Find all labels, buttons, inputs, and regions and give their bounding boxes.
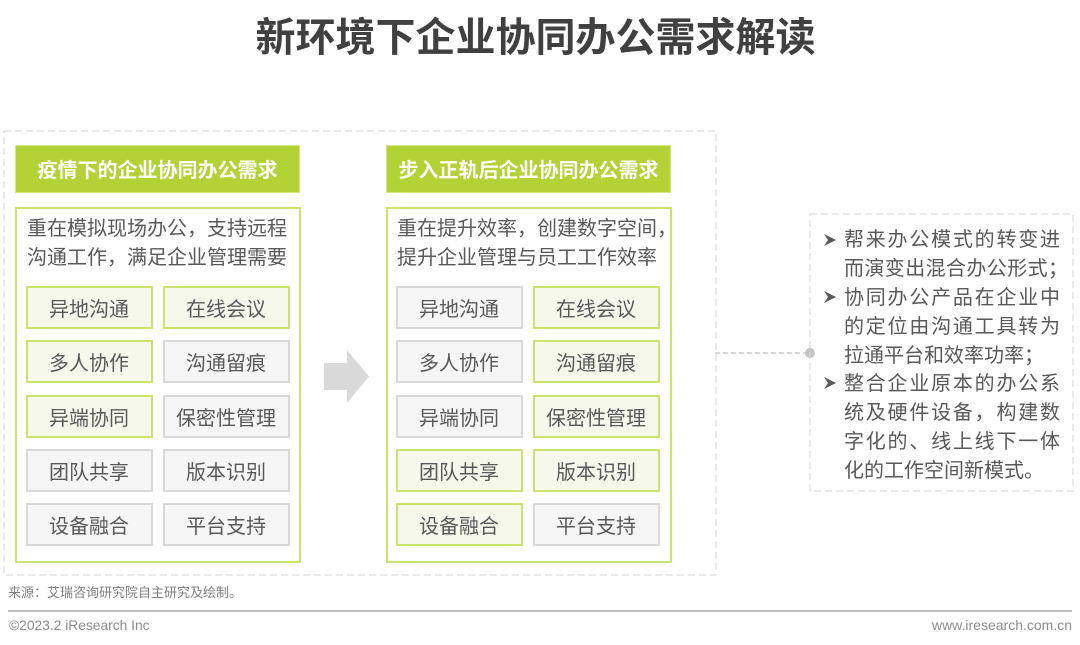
chip: device integration: 设备融合 xyxy=(49,516,129,538)
chip: collaboration xyxy=(26,340,153,383)
chip: platform support: 平台支持 xyxy=(186,516,266,538)
chip: remote communication: 异地沟通 xyxy=(419,299,499,321)
chip: communication trace: 沟通留痕 xyxy=(186,353,266,375)
takeaway line: 字化的、线上线下一体 xyxy=(844,431,1060,453)
chip: team sharing: 团队共享 xyxy=(49,462,129,484)
text block: takeaways xyxy=(824,228,1068,482)
chip: cross-device sync xyxy=(26,395,153,438)
takeaway line: 而演变出混合办公形式； xyxy=(844,258,1068,280)
panel: normalised needs xyxy=(386,207,672,563)
takeaway line: 拉通平台和效率功率； xyxy=(844,345,1044,367)
text: pandemic summary xyxy=(27,218,287,269)
bullet 2 xyxy=(824,291,836,303)
takeaway line: 统及硬件设备，构建数 xyxy=(844,402,1060,424)
chip: remote communication: 异地沟通 xyxy=(49,299,129,321)
text: pandemic summary: 重在模拟现场办公，支持远程 xyxy=(27,218,287,240)
chip: team sharing xyxy=(26,449,153,492)
takeaway line: 帮来办公模式的转变进 xyxy=(844,229,1060,251)
footer rule xyxy=(8,610,1072,612)
chip: version control xyxy=(533,449,660,492)
takeaway line: 协同办公产品在企业中 xyxy=(844,287,1060,309)
chip: online meeting: 在线会议 xyxy=(186,299,266,321)
chip: version control: 版本识别 xyxy=(186,462,266,484)
bullet 1 xyxy=(824,234,836,246)
chip: platform support: 平台支持 xyxy=(556,516,636,538)
chip: confidentiality management xyxy=(533,395,660,438)
chip: online meeting: 在线会议 xyxy=(556,299,636,321)
takeaway line: 化的工作空间新模式。 xyxy=(844,460,1044,482)
chip: device integration xyxy=(396,503,523,546)
chip: remote communication xyxy=(26,286,153,329)
chip: version control xyxy=(163,449,290,492)
footer: copyright: ©2023.2 iResearch Inc xyxy=(9,618,150,633)
panel: pandemic needs xyxy=(15,207,301,563)
text: normalised summary xyxy=(397,218,677,269)
panel: takeaways xyxy=(810,213,1074,492)
chip: collaboration xyxy=(396,340,523,383)
chip: device integration: 设备融合 xyxy=(419,516,499,538)
chip: collaboration: 多人协作 xyxy=(49,353,129,375)
takeaway line: 的定位由沟通工具转为 xyxy=(844,316,1060,338)
chip: confidentiality management: 保密性管理 xyxy=(546,408,646,430)
heading: pandemic needs: 疫情下的企业协同办公需求 xyxy=(38,160,278,182)
chip: version control: 版本识别 xyxy=(556,462,636,484)
text: normalised summary: 提升企业管理与员工工作效率 xyxy=(397,247,657,269)
chip: cross-device sync: 异端协同 xyxy=(419,408,499,430)
chip: team sharing xyxy=(396,449,523,492)
chip: platform support xyxy=(533,503,660,546)
chip: cross-device sync: 异端协同 xyxy=(49,408,129,430)
panel: outer dashed frame xyxy=(4,130,716,576)
chip: communication trace xyxy=(163,340,290,383)
chip: confidentiality management xyxy=(163,395,290,438)
chip: team sharing: 团队共享 xyxy=(419,462,499,484)
footer: website: www.iresearch.com.cn xyxy=(932,617,1072,633)
chip: communication trace xyxy=(533,340,660,383)
takeaway line: 整合企业原本的办公系 xyxy=(844,373,1060,395)
heading: pandemic needs xyxy=(15,145,300,193)
chip: cross-device sync xyxy=(396,395,523,438)
source note: 来源：艾瑞咨询研究院自主研究及绘制。 xyxy=(8,585,242,600)
chip: collaboration: 多人协作 xyxy=(419,353,499,375)
chip: online meeting xyxy=(163,286,290,329)
chip: platform support xyxy=(163,503,290,546)
chip: online meeting xyxy=(533,286,660,329)
chip: confidentiality management: 保密性管理 xyxy=(176,408,276,430)
chip: device integration xyxy=(26,503,153,546)
heading: normalised needs: 步入正轨后企业协同办公需求 xyxy=(398,160,658,182)
heading: normalised needs xyxy=(386,145,671,193)
chip: remote communication xyxy=(396,286,523,329)
bullet 3 xyxy=(824,377,836,389)
connector: dashed line with dot xyxy=(715,348,815,358)
arrow: transition xyxy=(324,350,369,403)
text: normalised summary: 重在提升效率，创建数字空间， xyxy=(397,218,677,240)
title: 新环境下企业协同办公需求解读 xyxy=(256,16,816,60)
text: pandemic summary: 沟通工作，满足企业管理需要 xyxy=(27,247,287,269)
chip: communication trace: 沟通留痕 xyxy=(556,353,636,375)
